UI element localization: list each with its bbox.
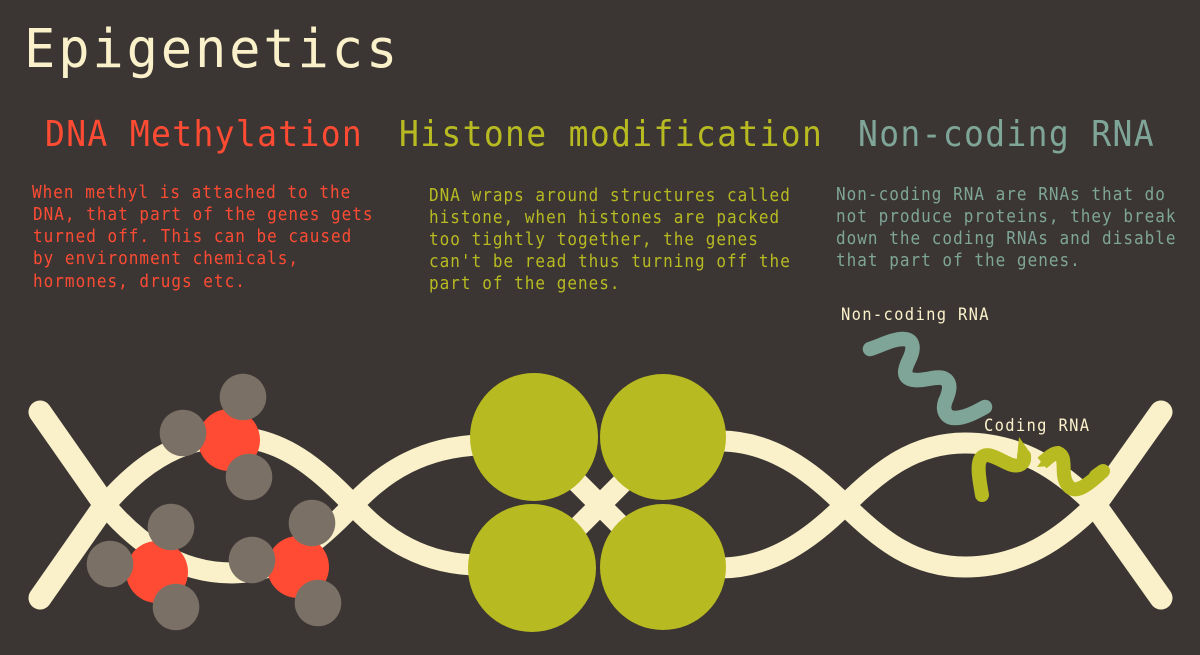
methyl group: lower left — [87, 504, 199, 630]
text block: histone description: part of the genes. — [429, 273, 621, 294]
histone cluster — [468, 373, 726, 632]
text block: methylation description — [32, 182, 374, 292]
methyl group: top — [160, 374, 272, 500]
text block: methylation description: hormones, drugs etc. — [33, 271, 246, 292]
text block: non-coding RNA description: that part of the genes. — [836, 250, 1081, 271]
DNA double helix — [40, 412, 1161, 598]
label: Coding RNA: Coding RNA — [984, 415, 1090, 435]
heading: Histone modification: Histone modification — [399, 114, 823, 155]
text block: histone description: histone, when histones are packed — [429, 207, 780, 228]
methyl group: lower right — [229, 500, 341, 626]
heading: DNA Methylation: DNA Methylation — [45, 114, 363, 155]
text block: methylation description: DNA, that part of the genes gets — [33, 204, 374, 225]
text block: histone description: can't be read thus turning off the — [429, 251, 791, 272]
text block: methylation description: When methyl is attached to the — [32, 182, 351, 203]
text block: non-coding RNA description: Non-coding RNA are RNAs that do — [836, 184, 1166, 205]
label: Non-coding RNA: Non-coding RNA — [841, 304, 990, 324]
text block: non-coding RNA description: down the coding RNAs and disable — [836, 228, 1177, 249]
coding RNA squiggle — [979, 437, 1103, 495]
text block: non-coding RNA description: not produce proteins, they break — [836, 206, 1177, 227]
text block: histone description — [429, 185, 791, 294]
text block: histone description: DNA wraps around structures called — [429, 185, 791, 206]
non-coding RNA squiggle — [870, 339, 985, 418]
text block: methylation description: by environment chemicals, — [33, 248, 299, 269]
text block: non-coding RNA description — [836, 184, 1177, 271]
title: Epigenetics — [24, 18, 400, 80]
heading: Non-coding RNA: Non-coding RNA — [858, 114, 1155, 155]
text block: methylation description: turned off. This can be caused — [33, 226, 352, 247]
text block: histone description: too tightly together, the genes — [429, 229, 759, 250]
